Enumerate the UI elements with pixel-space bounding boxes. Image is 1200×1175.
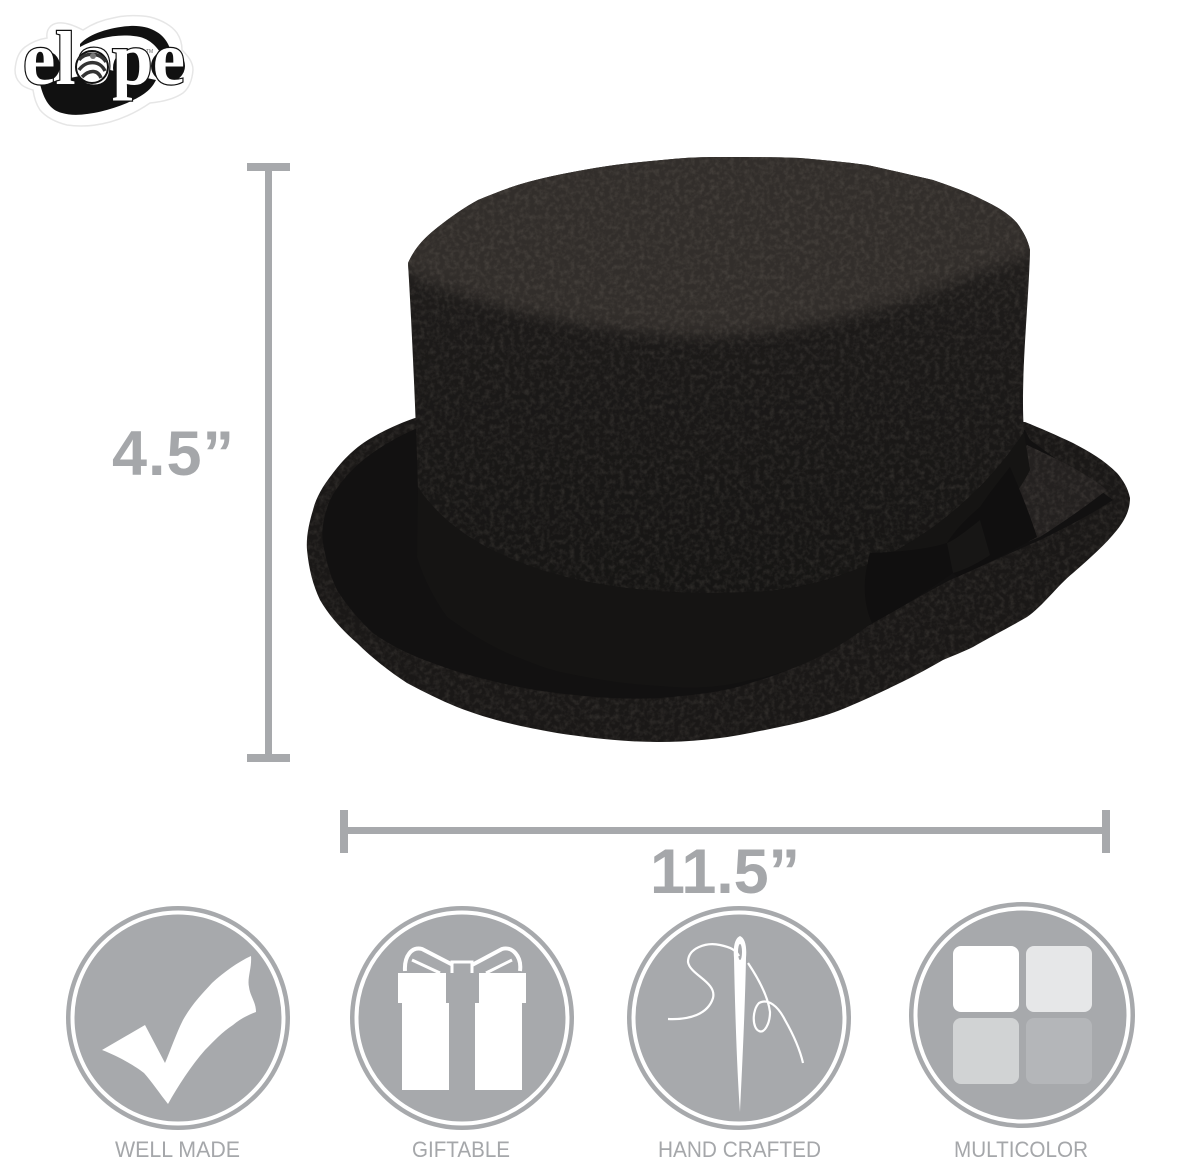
label: hand crafted: HAND CRAFTED <box>658 1137 821 1162</box>
width label: 11.5” <box>650 837 800 907</box>
hat crown <box>395 130 1045 593</box>
label: well made: WELL MADE <box>115 1137 240 1162</box>
badge: hand crafted <box>627 906 851 1162</box>
bow knot <box>947 520 990 573</box>
icon: check mark <box>102 956 256 1104</box>
icon: needle and thread <box>668 936 803 1112</box>
icon: gift box <box>398 948 526 1090</box>
logo: elope: TM <box>146 49 153 55</box>
top hat photo illustration <box>307 130 1130 742</box>
badge: giftable <box>350 906 574 1162</box>
bow <box>865 467 1037 623</box>
badge: well made <box>66 906 290 1162</box>
label: giftable: GIFTABLE <box>412 1137 510 1162</box>
badge: multicolor <box>909 902 1135 1162</box>
icon: color swatches <box>953 946 1092 1084</box>
height label: 4.5” <box>112 419 234 489</box>
crown top <box>408 157 1030 339</box>
hat brim outer lip <box>307 417 1130 742</box>
brim inner left and front <box>322 428 1113 699</box>
brim inner right <box>1005 445 1107 545</box>
crown body <box>408 157 1030 593</box>
height dimension bracket <box>247 163 290 762</box>
hat band <box>417 432 1030 688</box>
label: multicolor: MULTICOLOR <box>954 1137 1088 1162</box>
logo: elope: elope <box>23 17 185 101</box>
width dimension bracket <box>340 810 1110 853</box>
